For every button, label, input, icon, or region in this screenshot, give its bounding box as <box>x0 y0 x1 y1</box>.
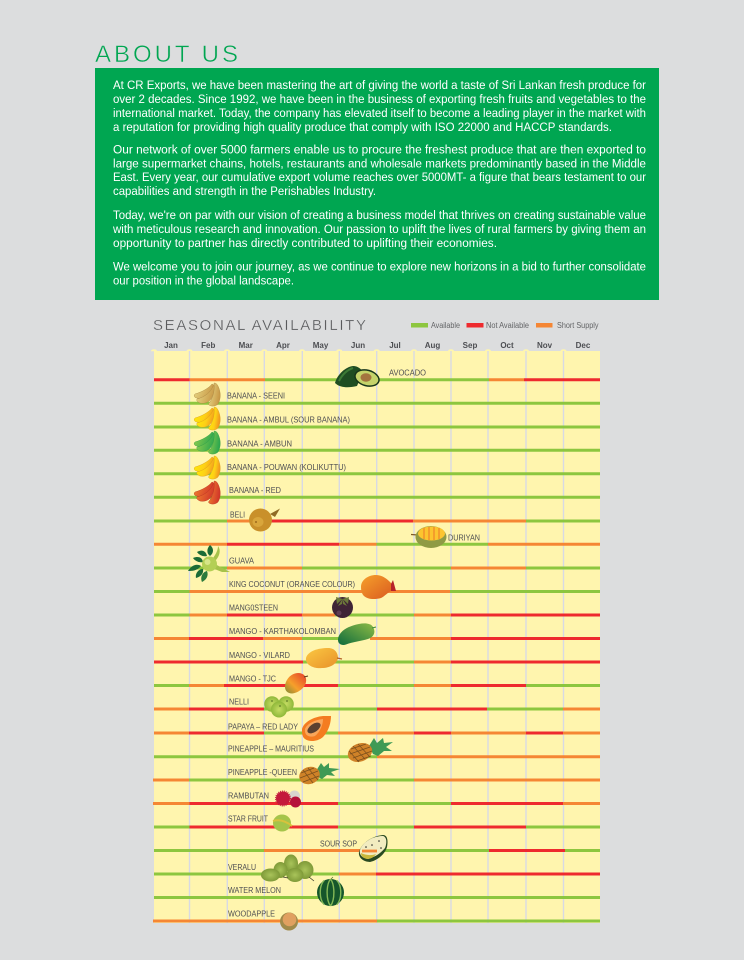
icon: banana seeni <box>194 383 220 406</box>
row: pineapple queen <box>153 763 600 787</box>
label: banana pouwan: BANANA - POUWAN (KOLIKUTTU) <box>227 463 346 472</box>
icon: king coconut <box>361 575 396 599</box>
row: guava <box>154 545 600 582</box>
row: king coconut <box>154 575 600 599</box>
paragraph: welcome: We welcome you to join our journey, as we continue to explore new horizons in a bid to further consolidate <box>113 260 646 274</box>
paragraph: vision <box>112 208 646 250</box>
paragraph: network: East. Every year, our cumulative export volume reaches over 5000MT- a figure that bears testament to our <box>113 170 646 184</box>
legend: Short Supply <box>557 321 598 330</box>
label: mango tjc: MANGO - TJC <box>229 675 276 684</box>
label: mango vilard: MANGO - VILARD <box>229 651 290 660</box>
row: banana ambul <box>154 407 600 430</box>
icon: mango vilard <box>306 648 342 668</box>
month headers <box>164 341 591 350</box>
month headers: Apr <box>276 341 290 350</box>
icon: mango karthakolomban <box>338 623 376 645</box>
paragraph: introduction: over 2 decades. Since 1992, we have been in the business of exporting fresh fruits and vegetables to the <box>113 92 646 106</box>
label: woodapple: WOODAPPLE <box>228 909 275 918</box>
icon: pineapple queen <box>297 763 340 787</box>
month headers: Dec <box>576 341 591 350</box>
paragraph: network: large supermarket chains, hotels, restaurants and wholesale markets predominantly based in the Middle <box>113 156 646 170</box>
label: nelli: NELLI <box>229 698 249 707</box>
paragraph: network <box>113 142 646 198</box>
paragraph: network: capabilities and strength in the Perishables Industry. <box>113 184 376 198</box>
month headers: May <box>313 341 329 350</box>
icon: rambutan <box>276 790 301 808</box>
label: rambutan: RAMBUTAN <box>228 791 269 800</box>
month headers: Jan <box>164 341 178 350</box>
heading: seasonal availability: SEASONAL AVAILABILITY <box>153 317 366 334</box>
title: about us: ABOUT US <box>95 41 238 68</box>
label: water melon: WATER MELON <box>228 886 281 895</box>
paragraph: introduction <box>113 78 646 134</box>
row: rambutan <box>153 790 600 808</box>
icon: veralu <box>261 854 314 882</box>
icon: nelli <box>264 696 294 718</box>
legend <box>411 321 598 330</box>
row: woodapple <box>153 909 600 930</box>
row: beli <box>154 508 600 532</box>
icon: guava <box>188 545 230 582</box>
chart: seasonal availability <box>151 349 600 930</box>
row: sour sop <box>154 835 600 862</box>
label: banana seeni: BANANA - SEENI <box>227 391 285 400</box>
row: duriyan <box>154 526 600 548</box>
icon: sour sop <box>359 835 388 862</box>
icon: banana ambul <box>194 407 220 430</box>
month headers: Jul <box>389 341 401 350</box>
label: papaya: PAPAYA – RED LADY <box>228 722 299 731</box>
paragraph: introduction: international market. Today, the company has elevated itself to become a leading player in the market with <box>113 106 646 120</box>
label: pineapple queen: PINEAPPLE -QUEEN <box>228 768 297 777</box>
month headers: Sep <box>463 341 477 350</box>
label: guava: GUAVA <box>229 557 255 566</box>
paragraph: vision: Today, we're on par with our vision of creating a business model that thrives on creating sustainable value <box>113 208 646 222</box>
icon: duriyan <box>411 526 446 548</box>
row: pineapple mauritius <box>154 738 600 765</box>
paragraph: vision: with meticulous research and innovation. Our passion to uplift the lives of rural farmers by giving them an <box>112 222 646 236</box>
icon: mangosteen <box>332 597 353 618</box>
icon: woodapple <box>280 912 298 930</box>
row: banana ambun <box>154 431 600 454</box>
icon: banana pouwan <box>194 456 220 479</box>
row: avocado <box>154 366 600 390</box>
label: banana red: BANANA - RED <box>229 486 281 495</box>
paragraph: introduction: At CR Exports, we have been mastering the art of giving the world a taste of Sri Lankan fresh produce for <box>113 78 646 92</box>
label: pineapple mauritius: PINEAPPLE – MAURITIUS <box>228 745 314 754</box>
label: star fruit: STAR FRUIT <box>228 815 268 824</box>
label: mango karthakolomban: MANGO - KARTHAKOLOMBAN <box>229 627 336 636</box>
label: duriyan: DURIYAN <box>448 534 480 543</box>
row: mango tjc <box>154 673 600 694</box>
month headers: Aug <box>425 341 440 350</box>
paragraph: welcome: our position in the global landscape. <box>113 274 294 288</box>
paragraph: welcome <box>113 260 646 288</box>
label: banana ambul: BANANA - AMBUL (SOUR BANANA) <box>227 416 350 424</box>
row: water melon <box>154 877 600 906</box>
paragraph: vision: opportunity to partner has directly contributed to uplifting their economies. <box>113 236 497 250</box>
legend: Available <box>431 321 460 330</box>
row: banana seeni <box>154 383 600 406</box>
icon: banana red <box>194 481 220 504</box>
month headers: Mar <box>239 341 253 350</box>
month headers: Jun <box>351 341 365 350</box>
row: nelli <box>154 696 600 718</box>
row: veralu <box>154 854 600 882</box>
label: mangosteen: MANG0STEEN <box>229 604 278 613</box>
icon: avocado <box>335 366 382 390</box>
legend: Not Available <box>486 321 529 330</box>
icon: water melon <box>317 877 344 906</box>
label: king coconut: KING COCONUT (ORANGE COLOUR) <box>229 580 355 589</box>
row: banana red <box>154 481 600 504</box>
label: avocado: AVOCADO <box>389 368 426 378</box>
icon: star fruit <box>273 814 292 832</box>
row: banana pouwan <box>154 456 600 479</box>
label: veralu: VERALU <box>228 863 256 872</box>
month headers: Oct <box>500 341 514 350</box>
icon: beli <box>249 508 280 532</box>
icon: banana ambun <box>194 431 220 454</box>
icon: papaya <box>302 716 331 741</box>
row: star fruit <box>154 814 600 832</box>
label: banana ambun: BANANA - AMBUN <box>227 440 292 448</box>
row: papaya <box>154 716 600 741</box>
row: mango vilard <box>154 648 600 668</box>
row: mango karthakolomban <box>154 623 600 645</box>
icon: mango tjc <box>285 673 308 694</box>
row: mangosteen <box>154 597 600 618</box>
label: sour sop: SOUR SOP <box>320 840 357 849</box>
month headers: Nov <box>537 341 553 350</box>
label: beli: BELI <box>230 510 245 520</box>
panel: about us text <box>95 68 659 300</box>
month headers: Feb <box>201 341 216 350</box>
paragraph: network: Our network of over 5000 farmers enable us to procure the freshest produce that are then exported to <box>113 142 646 156</box>
paragraph: introduction: a reputation for providing high quality produce that comply with ISO 22000 and HACCP standards. <box>113 120 612 134</box>
icon: pineapple mauritius <box>345 738 393 765</box>
